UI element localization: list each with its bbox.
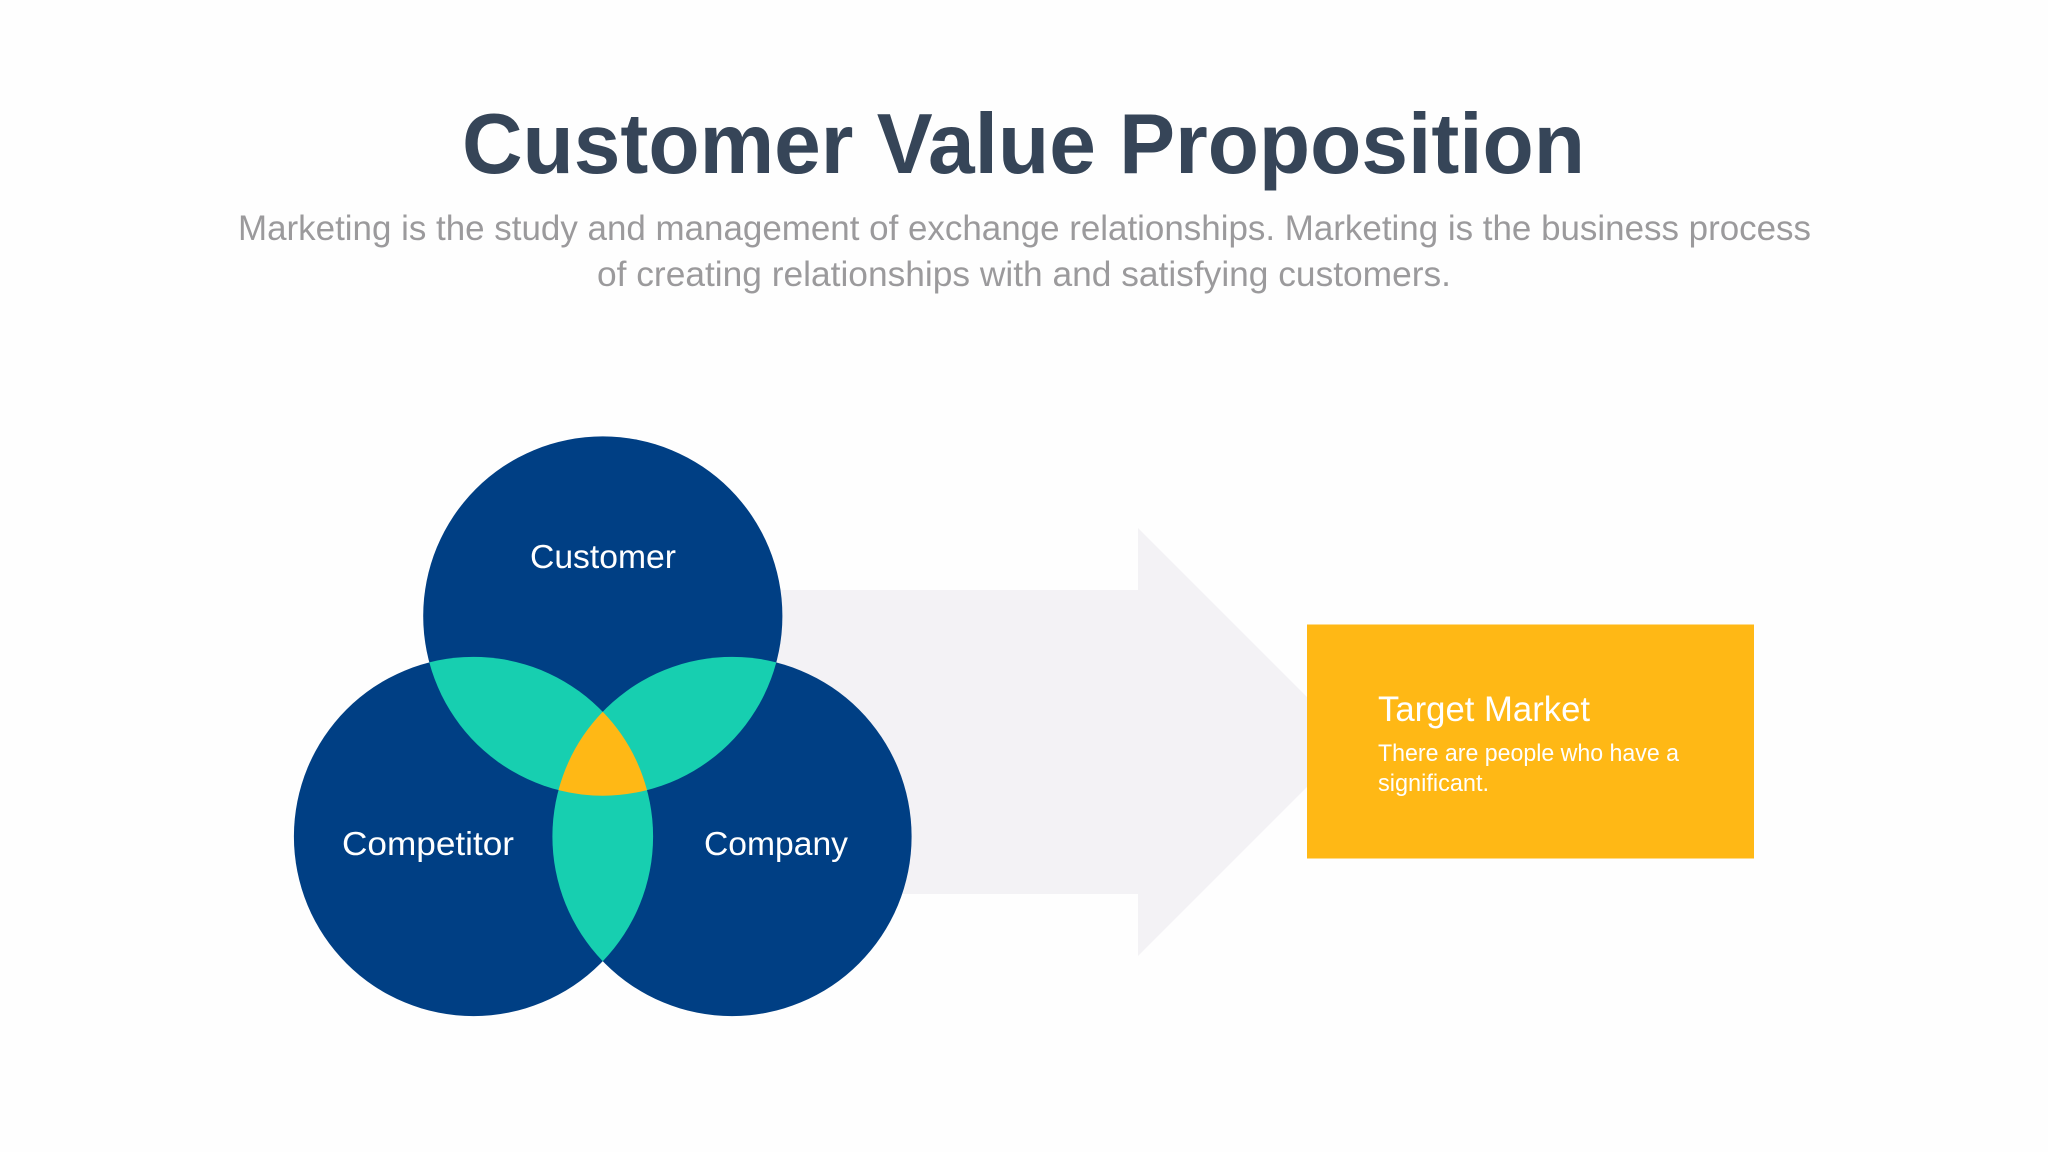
text block: target market description: significant. bbox=[1378, 770, 1489, 797]
text block: target market description: There are people who have a bbox=[1378, 740, 1680, 767]
label: competitor: Competitor bbox=[342, 825, 514, 862]
subtitle text block: Marketing is the study and management of exchange relationships. Marketing is the business process bbox=[238, 209, 1811, 248]
title: Customer Value Proposition bbox=[462, 97, 1585, 192]
panel: target market bbox=[1307, 624, 1754, 858]
venn diagram bbox=[294, 436, 912, 1016]
label: customer: Customer bbox=[530, 538, 676, 575]
overlap: customer and competitor bbox=[429, 657, 647, 796]
circle: company bbox=[552, 657, 912, 1016]
text block: target market description bbox=[1378, 740, 1680, 797]
circle: customer bbox=[423, 436, 782, 796]
circle: competitor bbox=[294, 657, 653, 1016]
overlap: competitor and company bbox=[552, 712, 653, 961]
label: company: Company bbox=[704, 825, 849, 862]
subtitle text block bbox=[238, 209, 1811, 294]
heading: target market: Target Market bbox=[1378, 690, 1590, 729]
overlap: customer and company bbox=[558, 657, 776, 796]
overlap: centre of all three bbox=[558, 712, 647, 796]
subtitle text block: of creating relationships with and satisfying customers. bbox=[597, 255, 1451, 294]
arrow pointing to target market bbox=[760, 528, 1352, 956]
